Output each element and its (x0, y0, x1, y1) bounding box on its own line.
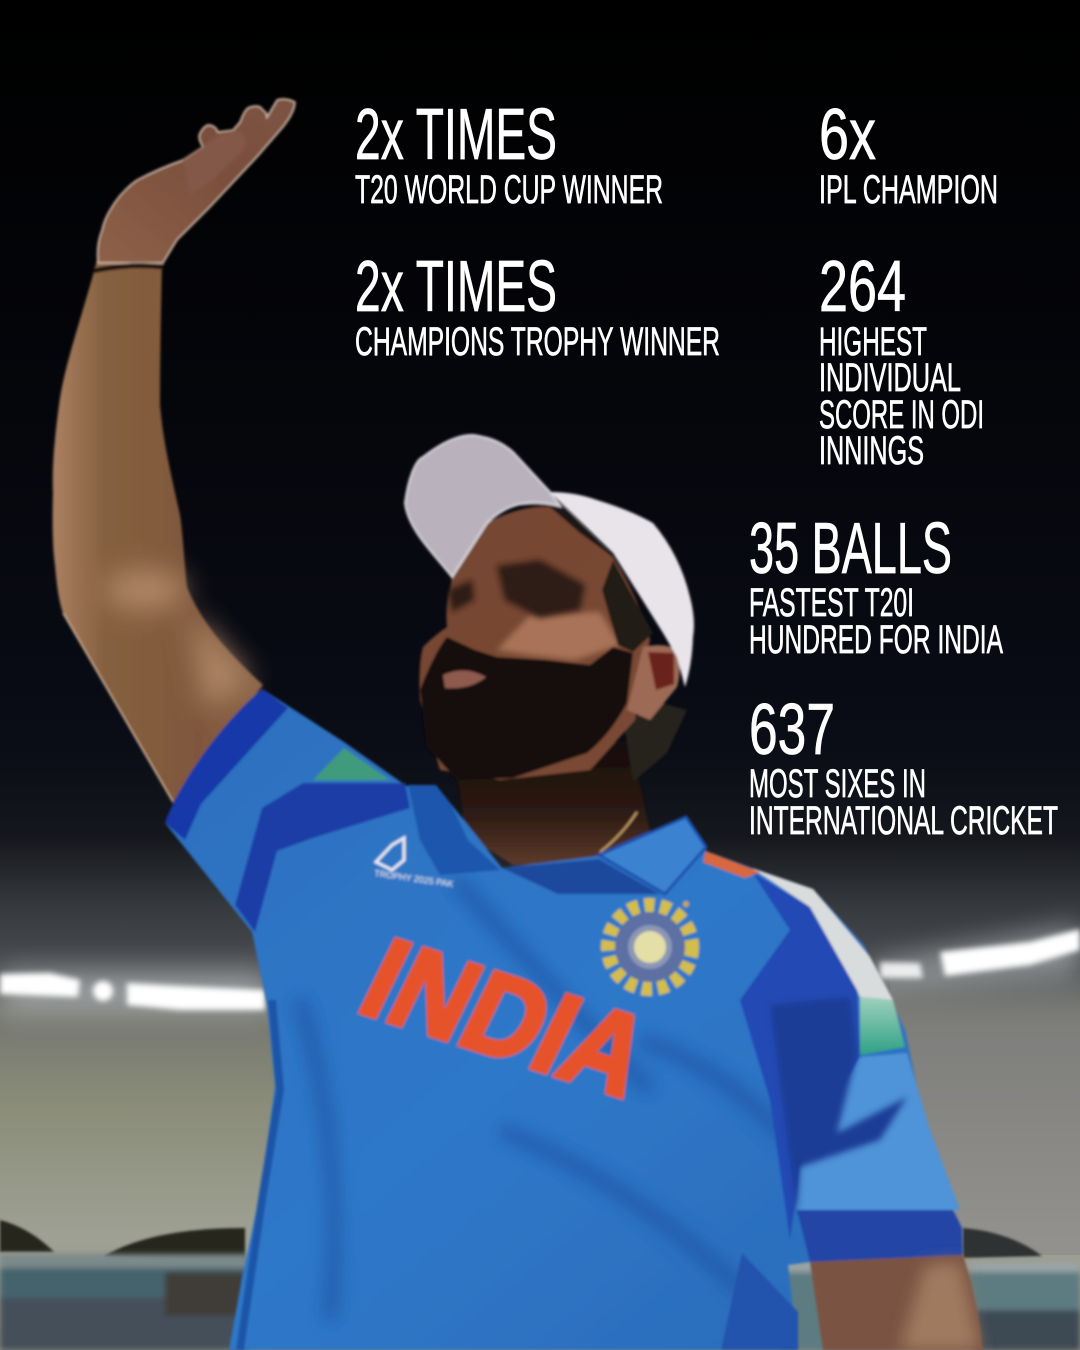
stat: Champions Trophy (355, 247, 720, 364)
white shoulder stripe (752, 868, 893, 1000)
sleeve shadow (770, 997, 907, 1215)
stat: Champions Trophy: 2x TIMES (355, 247, 557, 327)
ear (627, 645, 680, 720)
player figure (53, 99, 983, 1350)
stat: 637: MOST SIXES IN (749, 762, 926, 806)
stat: 264: INDIVIDUAL (819, 356, 961, 400)
arm rim light (63, 613, 173, 802)
left seam (240, 1000, 280, 1350)
stat: T20 World Cup: 2x TIMES (355, 95, 557, 175)
cap visor underside (452, 470, 613, 577)
orange shoulder trim (703, 851, 760, 878)
green shoulder stripe (313, 748, 390, 780)
stat: 264: HIGHEST (819, 320, 927, 364)
neck (457, 740, 650, 865)
raised arm (53, 260, 263, 802)
eye sockets (448, 560, 585, 618)
hair back (625, 700, 687, 782)
light glow (0, 925, 1080, 1012)
thumb (183, 131, 246, 195)
right forearm (810, 1255, 983, 1350)
neck chain (600, 812, 637, 852)
shoulder panel (235, 783, 410, 932)
tournament logo: TROPHY 2025 PAK (374, 868, 454, 889)
stadium lights right (880, 929, 1080, 978)
arm highlights (105, 570, 250, 710)
right shoulder panel (740, 872, 860, 1240)
stat: 637 (749, 690, 1058, 843)
right sleeve lower (797, 1053, 960, 1210)
forearm highlight (900, 1262, 980, 1350)
fabric folds (300, 881, 790, 1320)
stat: 264: INNINGS (819, 429, 924, 473)
stat: T20 World Cup (355, 95, 663, 212)
right wall tone (890, 970, 1080, 1255)
sleeve cuff (165, 689, 288, 840)
inner collar shade (502, 859, 660, 894)
stat: Champions Trophy: CHAMPIONS TROPHY WINNER (355, 320, 720, 364)
jersey lower fold (721, 1253, 798, 1350)
beard (420, 637, 633, 780)
jersey text INDIA: INDIA (343, 914, 671, 1120)
cheek highlight (497, 612, 620, 660)
wrist band (93, 266, 164, 271)
stat: T20 World Cup: T20 WORLD CUP WINNER (355, 168, 663, 212)
lower sleeve cuff (797, 1210, 963, 1262)
stat: 637: 637 (749, 690, 835, 770)
hand (98, 99, 295, 263)
lips (443, 670, 486, 688)
stat: 264: 264 (819, 247, 906, 327)
stat: IPL: 6x (819, 95, 876, 175)
cap visor (405, 435, 560, 577)
collar right (599, 817, 706, 894)
stat: 35 balls: 35 BALLS (749, 509, 952, 589)
stat: 35 balls: FASTEST T20I (749, 581, 914, 625)
stand roof arches (0, 1220, 1042, 1263)
stat: 35 balls (749, 509, 1003, 662)
temple hair (602, 560, 653, 652)
collar left (408, 785, 500, 875)
stadium lights left (0, 973, 265, 1010)
green sleeve stripe (860, 997, 905, 1055)
crowd band (0, 1254, 1080, 1350)
tournament logo (374, 838, 454, 889)
jersey body (165, 689, 963, 1350)
BCCI badge (608, 901, 692, 989)
stat: IPL (819, 95, 998, 212)
cap crown (550, 492, 694, 687)
stat: 264 (819, 247, 984, 473)
face (419, 507, 650, 780)
